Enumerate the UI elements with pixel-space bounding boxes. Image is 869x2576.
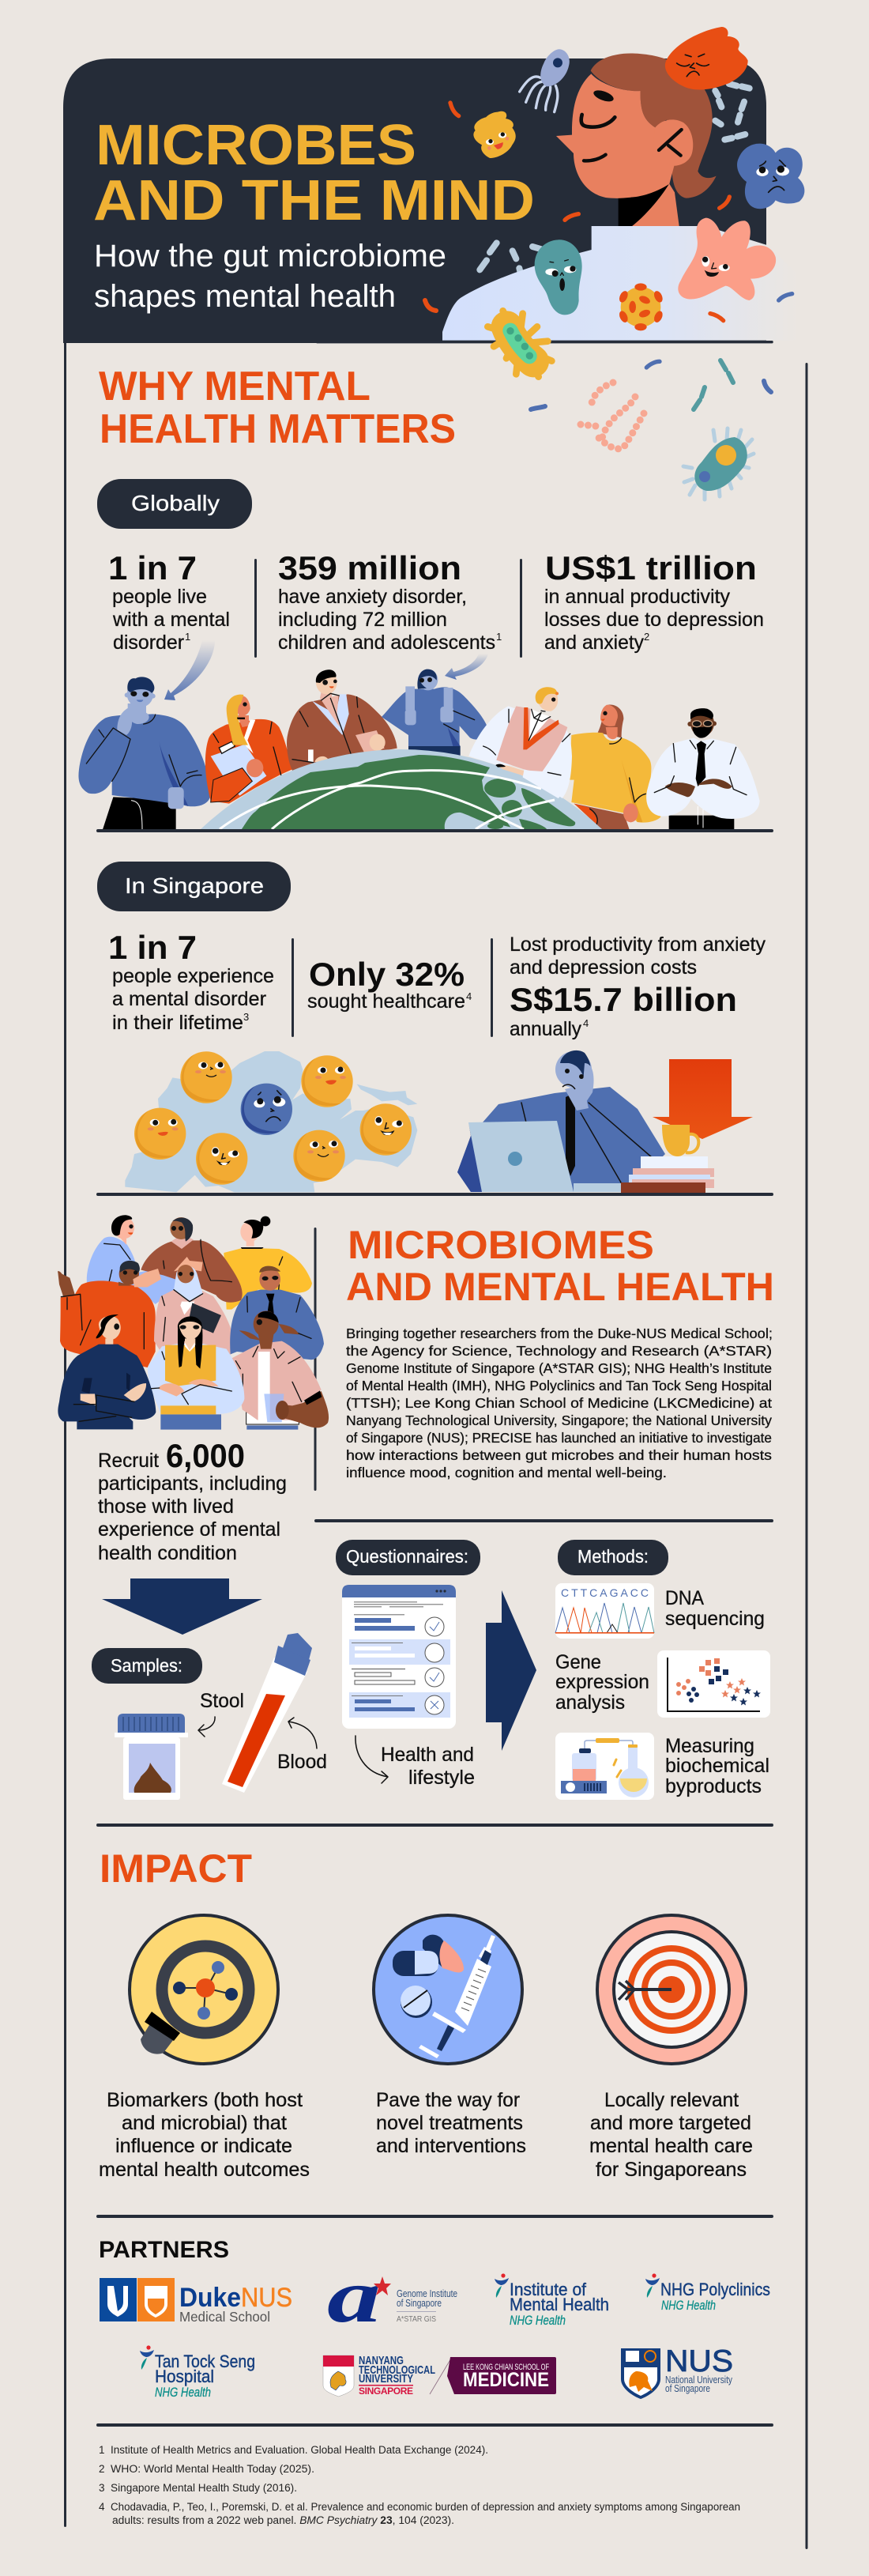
logo: A*STAR: a <box>327 2254 381 2338</box>
questionnaire card <box>342 1585 456 1729</box>
text: local care: and more targeted <box>590 2112 751 2134</box>
red down arrow <box>653 1059 753 1139</box>
illustration: people around globe <box>78 669 760 829</box>
rule <box>96 2423 773 2427</box>
logo: Duke-NUS: NUS <box>241 2283 292 2313</box>
title: MICROBES <box>96 114 416 177</box>
logo: Tan Tock Seng Hospital: Hospital <box>155 2367 214 2386</box>
icon: DNA sequencing card <box>555 1583 654 1639</box>
text: recruit 6,000: those with lived <box>98 1495 234 1518</box>
logo: A*STAR: of Singapore <box>397 2297 442 2309</box>
stat: 1 in 7 globally: 1 <box>185 631 190 643</box>
map <box>125 1051 417 1192</box>
footnotes: 1 <box>99 2444 105 2456</box>
stat: 359 million: 1 <box>496 631 502 643</box>
person: hijab <box>154 1257 235 1357</box>
person: blue shirt and tie <box>230 1266 324 1360</box>
stat: US$1 trillion: in annual productivity <box>544 586 730 608</box>
icon: pills and syringe <box>374 1915 522 2064</box>
stat: only 32% <box>307 956 472 1013</box>
arrow: to second person <box>445 654 488 680</box>
text: recruit 6,000: 6,000 <box>166 1437 245 1474</box>
stat: 359 million: 359 million <box>278 549 461 586</box>
section heading: why mental health matters: WHY MENTAL <box>99 364 371 409</box>
head <box>555 1050 594 1111</box>
logo: NUS: NUS <box>665 2344 733 2378</box>
icon: DNA sequencing card: CTTCAGACC <box>561 1586 649 1599</box>
footnotes: 4 <box>99 2501 105 2513</box>
label: gene expression analysis <box>555 1651 649 1714</box>
logo: NHG Polyclinics: NHG Health <box>661 2298 716 2313</box>
stat: S$15.7 billion: 4 <box>583 1017 589 1029</box>
stat: 1 in 7 Singapore: people experience <box>112 965 274 987</box>
title: AND THE MIND <box>93 169 535 232</box>
heading: microbiomes and mental health <box>346 1223 774 1309</box>
microbe: teal cell <box>683 428 754 500</box>
stat: S$15.7 billion: annually <box>510 1018 581 1040</box>
logo: Institute of Mental Health: NHG Health <box>510 2313 566 2328</box>
person: pink vest <box>468 687 572 798</box>
globe <box>201 749 602 829</box>
logo: Duke-NUS: Duke <box>179 2283 241 2313</box>
microbe dashes near the head <box>450 103 792 368</box>
icon: blood tube <box>222 1633 312 1793</box>
neck and collar shadow <box>618 183 679 228</box>
person: white shirt with tie <box>646 708 760 829</box>
pill: methods: Methods: <box>577 1546 649 1567</box>
person: brown jacket <box>287 669 397 771</box>
text: biomarkers <box>99 2089 310 2181</box>
text: biomarkers: and microbial) that <box>122 2112 287 2134</box>
microbe: pink blob <box>678 218 776 300</box>
icon: magnifier with molecule <box>130 1915 278 2064</box>
paragraph: influence mood, cognition and mental well-being. <box>346 1465 667 1480</box>
rule <box>96 829 773 832</box>
illustration: Singapore map with faces <box>125 1051 417 1192</box>
logo: NTU LKCMedicine <box>323 2354 556 2397</box>
grey microbe chains <box>480 84 750 273</box>
pill: questionnaires: Questionnaires: <box>346 1546 468 1567</box>
icon: stool sample cup <box>115 1714 188 1800</box>
pill: questionnaires <box>336 1540 480 1575</box>
stat: only 32%: sought healthcare <box>307 990 465 1013</box>
icon: lab apparatus card <box>555 1733 654 1800</box>
text: biomarkers: Biomarkers (both host <box>107 2089 303 2111</box>
paragraph: Bringing together researchers from the Duke-NUS Medical School; <box>346 1326 773 1341</box>
stat divider <box>254 559 257 658</box>
tie <box>566 1092 575 1176</box>
text: treatments: novel treatments <box>376 2112 523 2134</box>
logo: NTU LKCMedicine: SINGAPORE <box>359 2386 413 2397</box>
face: bottom right <box>293 1130 345 1182</box>
stat: 1 in 7 globally: 1 in 7 <box>108 549 197 586</box>
person: yellow vest <box>148 1316 244 1430</box>
logo: Duke-NUS <box>100 2278 292 2325</box>
subtitle <box>94 239 446 314</box>
microbe: yellow bacterium with green core <box>487 311 551 377</box>
pill: in Singapore: In Singapore <box>125 873 264 898</box>
person: backpack <box>382 669 488 756</box>
stat: S$15.7 billion: S$15.7 billion <box>510 981 737 1018</box>
logo: A*STAR: Genome Institute <box>397 2287 457 2299</box>
panel base line <box>316 341 773 343</box>
shirt <box>442 226 798 341</box>
label: health and lifestyle: lifestyle <box>408 1767 475 1789</box>
paragraph: of Singapore (NUS); PRECISE has launched an initiative to investigate <box>346 1430 772 1446</box>
text: biomarkers: mental health outcomes <box>99 2159 310 2181</box>
stat divider <box>491 938 493 1037</box>
label: gene expression analysis: expression <box>555 1671 649 1693</box>
stat: only 32%: 4 <box>466 990 472 1002</box>
face: top right <box>301 1055 353 1107</box>
stat: 1 in 7 globally: people live <box>112 586 207 608</box>
text: local care: Locally relevant <box>604 2089 739 2111</box>
text: recruit 6,000: participants, including <box>98 1473 287 1495</box>
logo: Institute of Mental Health <box>495 2273 609 2328</box>
text: recruit 6,000: health condition <box>98 1542 237 1564</box>
icon: scatter plot card <box>657 1650 770 1718</box>
stat: S$15.7 billion <box>510 933 766 1040</box>
face: right <box>360 1103 412 1156</box>
arrow: to first person <box>164 640 215 700</box>
pill: in Singapore <box>97 862 291 911</box>
label: gene expression analysis: Gene <box>555 1651 601 1673</box>
stat: 1 in 7 globally: disorder <box>113 632 184 654</box>
microbe: squid <box>520 49 570 112</box>
microbe: blue blob <box>737 144 804 209</box>
logo: Tan Tock Seng Hospital: Tan Tock Seng <box>155 2352 255 2371</box>
footnotes: 2 <box>99 2463 105 2475</box>
label: measuring biochemical byproducts <box>665 1735 769 1797</box>
footnotes: WHO: World Mental Health Today (2025). <box>111 2463 314 2475</box>
footnotes: 3 <box>99 2482 105 2494</box>
label: health and lifestyle <box>381 1744 475 1789</box>
pill: samples: Samples: <box>111 1655 182 1676</box>
logo: NHG Polyclinics <box>645 2273 770 2313</box>
person: navy jumper <box>58 1314 156 1429</box>
arrow: stool label to cup <box>198 1717 215 1737</box>
arrow: down to samples <box>102 1578 262 1635</box>
microbe dashes below the banner <box>425 300 771 409</box>
hair <box>591 54 717 198</box>
footnotes: Singapore Mental Health Study (2016). <box>111 2482 297 2494</box>
ear <box>653 119 693 166</box>
person: orange jumper <box>58 1261 161 1367</box>
paragraph: the Agency for Science, Technology and Research (A*STAR) <box>346 1343 772 1359</box>
stat: 359 million: have anxiety disorder, <box>278 586 467 608</box>
logo: NTU LKCMedicine: LEE KONG CHIAN SCHOOL OF <box>463 2363 549 2372</box>
illustration: woman and microbes <box>316 27 804 377</box>
text: treatments: and interventions <box>376 2135 526 2157</box>
paragraph: (TTSH); Lee Kong Chian School of Medicine (LKCMedicine) at <box>346 1395 772 1411</box>
face: left <box>134 1108 186 1160</box>
microbe: yellow blob <box>473 111 516 158</box>
logo: NTU LKCMedicine: TECHNOLOGICAL <box>359 2363 435 2377</box>
text: treatments: Pave the way for <box>376 2089 520 2111</box>
stat: 1 in 7 Singapore: 3 <box>243 1011 249 1023</box>
microbe: virus <box>618 283 664 330</box>
dark banner <box>63 58 766 343</box>
text: local care <box>589 2089 753 2181</box>
face: centre sad <box>241 1084 292 1135</box>
text: treatments <box>376 2089 526 2157</box>
footnotes: adults: results from a 2022 web panel. BMC Psychiatry 23, 104 (2023). <box>112 2514 454 2526</box>
stat: S$15.7 billion: and depression costs <box>510 956 697 979</box>
arrow: blood label to tube <box>288 1718 317 1748</box>
label: gene expression analysis: analysis <box>555 1692 625 1714</box>
face: bottom left <box>196 1133 247 1185</box>
section heading: why mental health matters <box>99 364 456 452</box>
paragraph: Genome Institute of Singapore (A*STAR GIS); NHG Health’s Institute <box>346 1360 772 1376</box>
stat: 1 in 7 Singapore: in their lifetime <box>112 1012 243 1034</box>
label: measuring biochemical byproducts: Measuring <box>665 1735 754 1757</box>
footnotes: Institute of Health Metrics and Evaluation. Global Health Data Exchange (2024). <box>111 2444 488 2456</box>
label: measuring biochemical byproducts: byproducts <box>665 1775 762 1797</box>
logo: NUS: of Singapore <box>665 2382 710 2394</box>
stat: 1 in 7 globally: with a mental <box>112 609 230 631</box>
heading: impact: IMPACT <box>100 1846 252 1891</box>
person: brown jumper <box>141 1217 243 1303</box>
stat: 359 million: including 72 million <box>278 609 447 631</box>
logo: Institute of Mental Health: Institute of <box>510 2280 587 2299</box>
laptop <box>468 1121 624 1192</box>
face: top left <box>180 1051 232 1103</box>
books <box>621 1156 714 1194</box>
stat divider <box>292 938 294 1037</box>
logo: A*STAR <box>327 2254 457 2338</box>
logo: Tan Tock Seng Hospital <box>140 2345 255 2400</box>
stat: 1 in 7 Singapore <box>108 929 274 1034</box>
paragraph: of Mental Health (IMH), NHG Polyclinics and Tan Tock Seng Hospital <box>346 1378 772 1394</box>
person: orange jacket <box>205 695 292 804</box>
logo: NUS: National University <box>665 2374 732 2386</box>
stat: US$1 trillion: US$1 trillion <box>545 549 757 586</box>
stat divider <box>520 559 522 658</box>
stat: US$1 trillion: losses due to depression <box>544 609 764 631</box>
subtitle: shapes mental health <box>94 279 396 314</box>
paragraph: Nanyang Technological University, Singapore; the National University <box>346 1412 772 1428</box>
text: recruit 6,000 <box>98 1437 287 1564</box>
arrow: to methods <box>486 1590 536 1751</box>
header panel <box>63 27 804 500</box>
rule <box>314 1519 773 1522</box>
label: stool: Stool <box>200 1690 244 1712</box>
text: local care: mental health care <box>589 2135 753 2157</box>
stat: 1 in 7 Singapore: a mental disorder <box>112 988 266 1010</box>
logo: NTU LKCMedicine: UNIVERSITY <box>359 2372 413 2386</box>
footnotes: Chodavadia, P., Teo, I., Poremski, D. et al. Prevalence and economic burden of depression and anxiety symptoms among Singaporean <box>111 2501 740 2513</box>
heading: microbiomes and mental health: AND MENTAL HEALTH <box>346 1265 774 1309</box>
rule <box>96 1193 773 1196</box>
logo: NUS <box>621 2344 733 2399</box>
pill: globally <box>97 479 252 529</box>
logo: NTU LKCMedicine: NANYANG <box>359 2354 404 2367</box>
logo: Tan Tock Seng Hospital: NHG Health <box>155 2385 211 2400</box>
microbe: red blob <box>665 27 748 89</box>
title <box>93 114 535 232</box>
label: DNA sequencing: DNA <box>665 1587 704 1609</box>
stat: US$1 trillion: and anxiety <box>544 632 644 654</box>
label: DNA sequencing <box>665 1587 765 1630</box>
label: health and lifestyle: Health and <box>381 1744 474 1766</box>
pill: methods <box>558 1540 668 1575</box>
person: yellow jumper <box>224 1216 312 1310</box>
people left of the globe <box>78 669 488 829</box>
face <box>556 74 674 198</box>
illustration: group of nine participants <box>58 1215 329 1430</box>
pill: samples <box>92 1648 202 1684</box>
footnotes <box>99 2444 740 2526</box>
stat: only 32%: Only 32% <box>309 956 465 993</box>
logo: NTU LKCMedicine: MEDICINE <box>463 2369 549 2391</box>
label: blood: Blood <box>277 1751 327 1773</box>
frame lines <box>64 340 807 2549</box>
person: hoodie <box>87 1215 176 1304</box>
stat: US$1 trillion: 2 <box>644 631 649 643</box>
stat: 1 in 7 Singapore: 1 in 7 <box>108 929 197 966</box>
body <box>457 1087 665 1192</box>
logo: NHG Polyclinics: NHG Polyclinics <box>660 2280 770 2299</box>
paragraph <box>346 1326 773 1480</box>
stat: 359 million <box>278 549 502 654</box>
stat: US$1 trillion <box>544 549 764 654</box>
arrow: health and lifestyle <box>356 1736 388 1783</box>
rule <box>96 2215 773 2218</box>
microbe: teal blob <box>535 239 582 315</box>
facial features <box>581 88 682 160</box>
logo: Duke-NUS: Medical School <box>179 2309 270 2325</box>
heading: microbiomes and mental health: MICROBIOMES <box>348 1223 654 1267</box>
label: measuring biochemical byproducts: biochemical <box>665 1755 769 1777</box>
illustration: worried man at laptop <box>457 1050 753 1194</box>
stat: S$15.7 billion: Lost productivity from anxiety <box>510 933 766 956</box>
text: biomarkers: influence or indicate <box>115 2135 292 2157</box>
stat: 1 in 7 globally <box>108 549 230 654</box>
logo: A*STAR: A*STAR GIS <box>397 2315 436 2324</box>
heading: partners: PARTNERS <box>99 2237 229 2263</box>
rule <box>96 1824 773 1827</box>
paragraph: how interactions between gut microbes and their human hosts <box>346 1447 772 1463</box>
divider <box>314 1228 316 1491</box>
subtitle: How the gut microbiome <box>94 239 446 273</box>
section heading: why mental health matters: HEALTH MATTERS <box>100 406 456 452</box>
text: recruit 6,000: Recruit <box>98 1450 159 1472</box>
microbe: pink chain <box>581 383 644 449</box>
icon: target with arrow <box>597 1915 746 2064</box>
pill: globally: Globally <box>131 491 220 515</box>
logo: Institute of Mental Health: Mental Health <box>510 2295 609 2314</box>
stat: 359 million: children and adolescents <box>278 632 495 654</box>
text: recruit 6,000: experience of mental <box>98 1518 280 1541</box>
person: blue sweater <box>78 677 211 829</box>
person: yellow sweater and white shirt <box>570 704 760 829</box>
person: pink shirt <box>231 1311 329 1430</box>
text: local care: for Singaporeans <box>596 2159 747 2181</box>
label: DNA sequencing: sequencing <box>665 1608 765 1630</box>
mug <box>662 1125 698 1156</box>
person: yellow sweater <box>570 704 661 829</box>
